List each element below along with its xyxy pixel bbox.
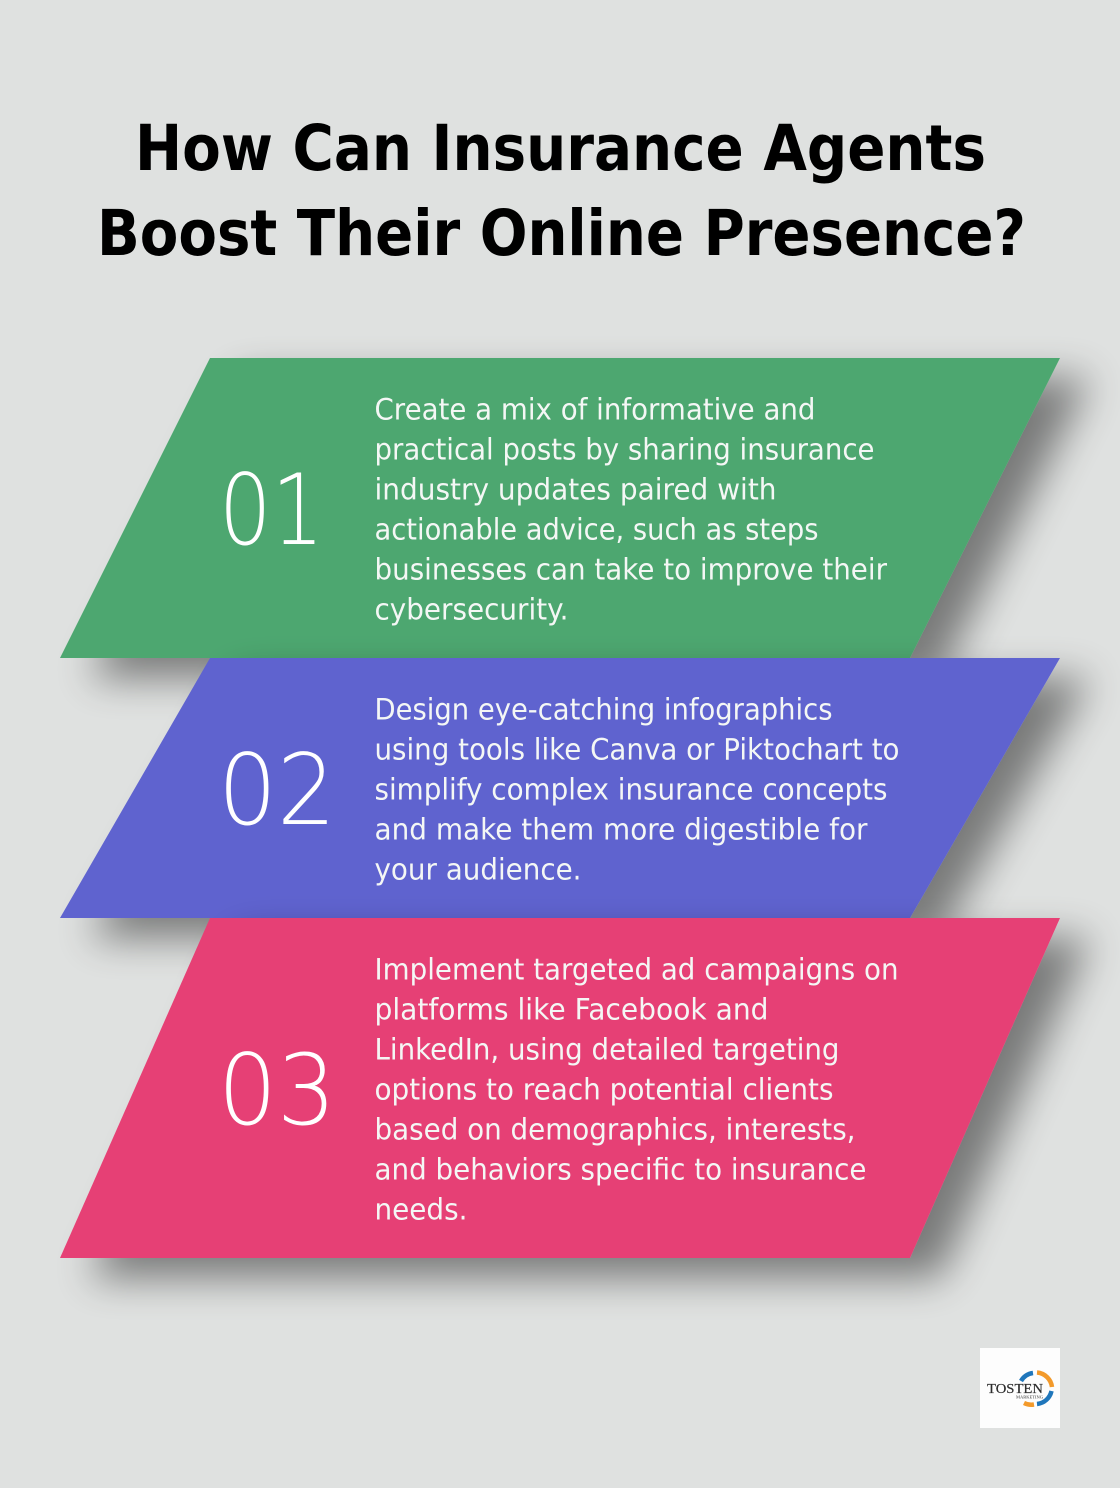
text: step 2 description: your audience. bbox=[374, 852, 582, 886]
text: step 2 description: Design eye-catching infographics bbox=[374, 692, 832, 726]
text: step 1 description: businesses can take to improve their bbox=[374, 552, 887, 586]
text: step 3 description bbox=[374, 952, 898, 1226]
text: step 2 description bbox=[374, 692, 900, 886]
text: step 3 description: needs. bbox=[374, 1192, 468, 1226]
logo wordmark: TOSTEN bbox=[987, 1382, 1043, 1397]
text: step 3 description: platforms like Facebook and bbox=[374, 992, 768, 1026]
number: 03: 03 bbox=[218, 1034, 336, 1148]
panel: step 2 bbox=[60, 658, 1060, 918]
text: step 2 description: simplify complex insurance concepts bbox=[374, 772, 888, 806]
icon: gear ring bbox=[1021, 1372, 1052, 1405]
text: step 3 description: and behaviors specific to insurance bbox=[374, 1152, 866, 1186]
title bbox=[97, 112, 1026, 270]
panel: step 3 bbox=[60, 918, 1060, 1258]
panel: step 1 bbox=[60, 358, 1060, 658]
text: step 3 description: Implement targeted ad campaigns on bbox=[374, 952, 898, 986]
logo tagline: MARKETING bbox=[1016, 1394, 1044, 1400]
text: step 2 description: using tools like Canva or Piktochart to bbox=[374, 732, 900, 766]
text: step 1 description: Create a mix of informative and bbox=[374, 392, 816, 426]
number: 02: 02 bbox=[218, 734, 336, 848]
text: step 1 description bbox=[374, 392, 887, 626]
title: How Can Insurance Agents bbox=[135, 112, 986, 185]
text: step 3 description: LinkedIn, using detailed targeting bbox=[374, 1032, 840, 1066]
number: 01: 01 bbox=[219, 454, 324, 568]
title: Boost Their Online Presence? bbox=[97, 197, 1026, 270]
text: step 2 description: and make them more digestible for bbox=[374, 812, 868, 846]
text: step 3 description: options to reach potential clients bbox=[374, 1072, 834, 1106]
text: step 1 description: practical posts by sharing insurance bbox=[374, 432, 874, 466]
text: step 1 description: cybersecurity. bbox=[374, 592, 568, 626]
text: step 1 description: actionable advice, such as steps bbox=[374, 512, 818, 546]
text: step 1 description: industry updates paired with bbox=[374, 472, 776, 506]
text: step 3 description: based on demographics, interests, bbox=[374, 1112, 856, 1146]
logo: Tosten Marketing bbox=[980, 1348, 1060, 1428]
